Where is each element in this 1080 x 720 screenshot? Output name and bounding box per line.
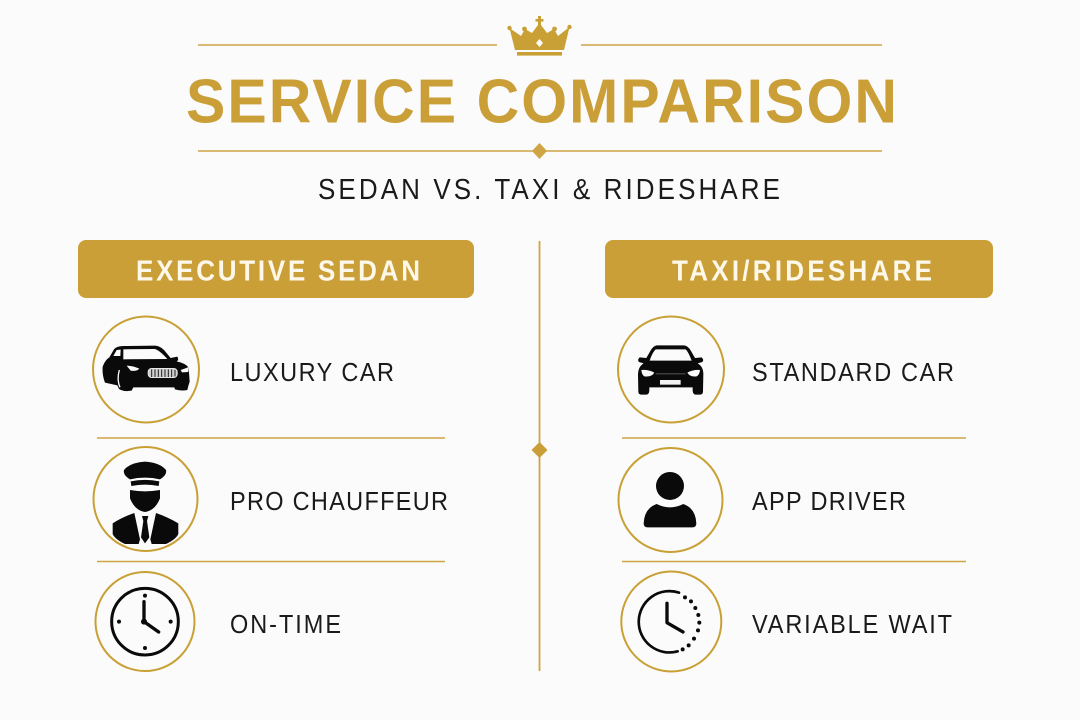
banner: taxi/rideshare	[605, 240, 993, 298]
icon: chauffeur	[94, 447, 198, 551]
center divider	[532, 241, 548, 671]
icon: app driver	[618, 448, 722, 552]
icon: on-time clock	[96, 572, 194, 671]
banner: executive sedan: EXECUTIVE SEDAN	[136, 254, 420, 287]
banner: executive sedan	[78, 240, 474, 298]
icon: variable wait clock	[621, 572, 721, 672]
panel: executive sedan	[78, 240, 474, 671]
label: luxury car: LUXURY CAR	[230, 359, 394, 387]
label: variable wait: VARIABLE WAIT	[752, 611, 952, 639]
header	[186, 16, 897, 205]
banner: taxi/rideshare: TAXI/RIDESHARE	[672, 254, 932, 287]
icon: crown	[507, 16, 572, 56]
icon: luxury car	[93, 316, 199, 422]
diamond	[532, 143, 547, 159]
label: app driver: APP DRIVER	[752, 488, 906, 516]
icon: standard car	[618, 316, 724, 422]
panel: taxi and rideshare	[605, 240, 993, 672]
subtitle: SEDAN VS. TAXI & RIDESHARE	[318, 173, 780, 205]
label: on-time: ON-TIME	[230, 611, 341, 639]
label: standard car: STANDARD CAR	[752, 359, 954, 387]
label: pro chauffeur: PRO CHAUFFEUR	[230, 488, 448, 516]
title: SERVICE COMPARISON	[186, 66, 897, 136]
